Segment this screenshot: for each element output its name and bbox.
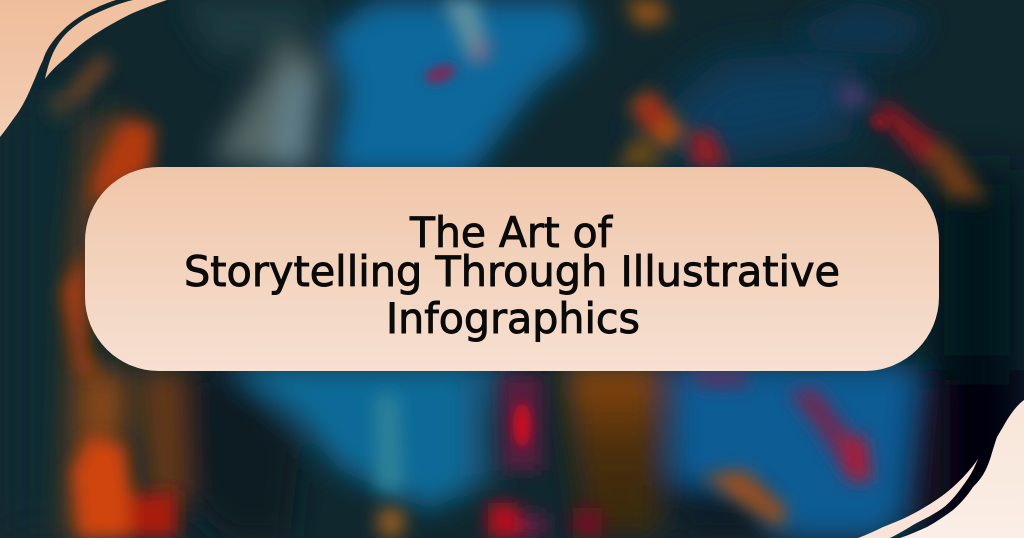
corner shape: bottom right swoosh	[858, 400, 1024, 538]
title text: The Art of	[409, 208, 613, 257]
title pill	[85, 167, 939, 371]
corner shape: top left swoosh	[0, 0, 167, 137]
title text	[184, 208, 840, 343]
title text: Storytelling Through Illustrative	[184, 247, 840, 296]
title text: Infographics	[386, 294, 640, 343]
